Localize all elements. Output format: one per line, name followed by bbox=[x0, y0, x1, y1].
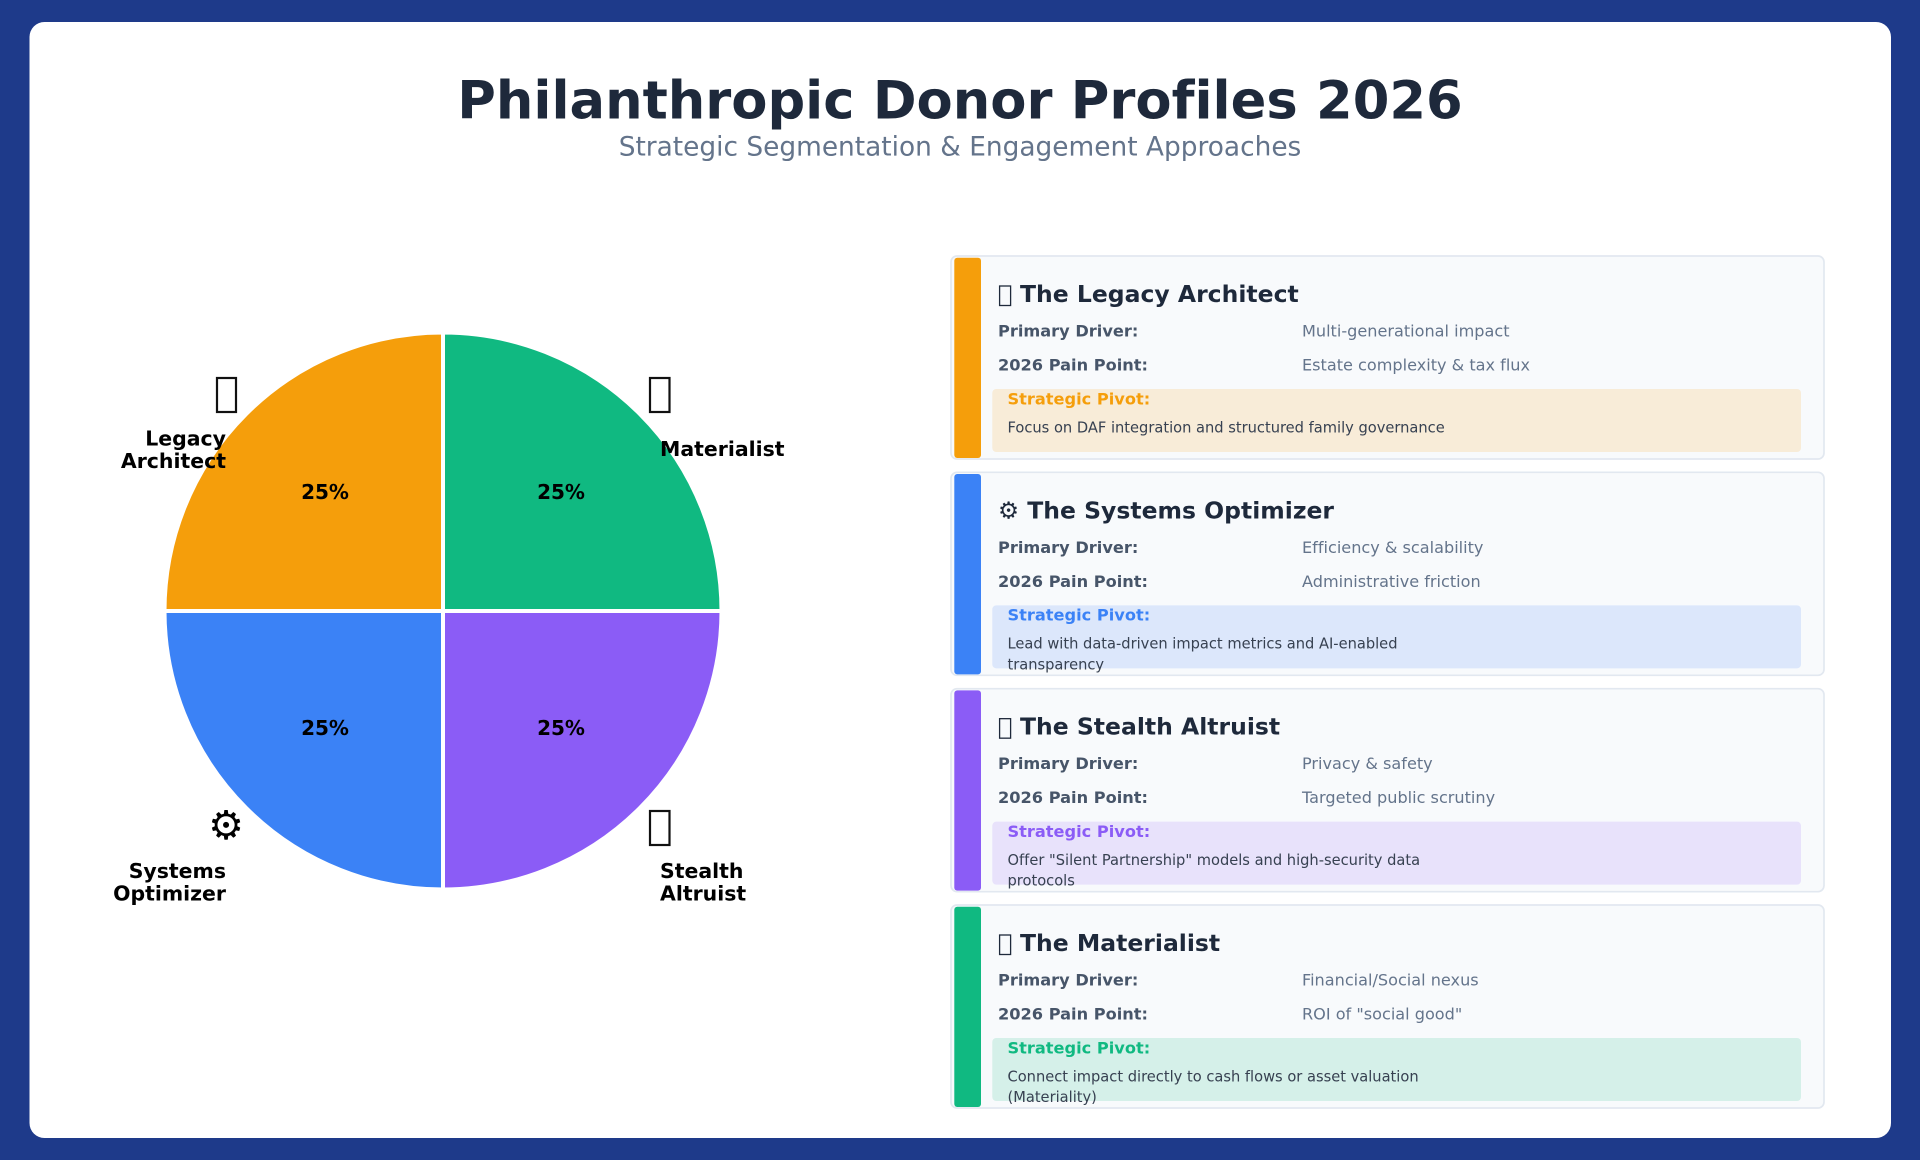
primary driver row bbox=[998, 322, 1510, 340]
pain point row: Administrative friction bbox=[1302, 572, 1481, 591]
card heading: The Stealth Altruist bbox=[1020, 713, 1280, 741]
panel: The Materialist bbox=[951, 905, 1824, 1108]
strategic pivot box bbox=[992, 605, 1801, 673]
panel: The Systems Optimizer bbox=[951, 472, 1824, 675]
primary driver row: Primary Driver: bbox=[998, 970, 1138, 990]
pain point row: ROI of "social good" bbox=[1302, 1004, 1462, 1024]
icon: placeholder glyph bbox=[1000, 935, 1011, 954]
primary driver row: Multi-generational impact bbox=[1302, 322, 1510, 340]
label: Systems Optimizer: Systems bbox=[129, 859, 226, 883]
slice: Materialist 25% bbox=[443, 332, 722, 611]
card background bbox=[951, 689, 1824, 892]
percentage: Legacy Architect: 25% bbox=[301, 480, 349, 504]
icon: Stealth Altruist placeholder glyph bbox=[650, 811, 670, 845]
strategic pivot box bbox=[992, 1038, 1801, 1106]
pain point row: 2026 Pain Point: bbox=[998, 356, 1148, 374]
primary driver row bbox=[998, 970, 1479, 990]
card background bbox=[951, 905, 1824, 1108]
card heading: ⚙ The Systems Optimizer bbox=[998, 496, 1334, 524]
percentage: Stealth Altruist: 25% bbox=[537, 716, 585, 740]
accent bar bbox=[954, 258, 981, 458]
pain point row bbox=[998, 1004, 1462, 1024]
strategic pivot box: Connect impact directly to cash flows or asset valuation bbox=[1008, 1068, 1419, 1085]
strategic pivot box bbox=[992, 389, 1801, 452]
card background bbox=[951, 472, 1824, 675]
strategic pivot box: Strategic Pivot: bbox=[1008, 606, 1150, 625]
accent bar bbox=[954, 907, 981, 1107]
title: Philanthropic Donor Profiles 2026 bbox=[457, 70, 1463, 132]
label: Legacy Architect: Architect bbox=[121, 449, 226, 473]
icon: gear: ⚙ bbox=[208, 803, 244, 849]
primary driver row: Financial/Social nexus bbox=[1302, 970, 1479, 990]
primary driver row: Privacy & safety bbox=[1302, 754, 1433, 773]
pain point row: Estate complexity & tax flux bbox=[1302, 356, 1530, 374]
slice: Legacy Architect 25% bbox=[164, 332, 443, 611]
icon: Legacy Architect placeholder glyph bbox=[217, 378, 236, 412]
primary driver row: Primary Driver: bbox=[998, 754, 1138, 773]
icon: placeholder glyph bbox=[1000, 719, 1011, 738]
percentage: Materialist: 25% bbox=[537, 480, 585, 504]
pain point row bbox=[998, 572, 1481, 591]
strategic pivot box: Lead with data-driven impact metrics and AI-enabled bbox=[1008, 636, 1398, 653]
strategic pivot box: protocols bbox=[1008, 873, 1075, 890]
panel: The Legacy Architect bbox=[951, 256, 1824, 459]
pain point row: 2026 Pain Point: bbox=[998, 572, 1148, 591]
label: Stealth Altruist: Altruist bbox=[660, 882, 746, 906]
primary driver row bbox=[998, 538, 1484, 557]
card heading: The Legacy Architect bbox=[1020, 280, 1299, 308]
pain point row bbox=[998, 356, 1530, 374]
subtitle: Strategic Segmentation & Engagement Approaches bbox=[619, 132, 1301, 163]
label: Stealth Altruist: Stealth bbox=[660, 859, 743, 883]
strategic pivot box: Strategic Pivot: bbox=[1008, 389, 1150, 408]
icon: placeholder glyph bbox=[1000, 286, 1011, 306]
primary driver row bbox=[998, 754, 1433, 773]
panel: The Stealth Altruist bbox=[951, 689, 1824, 892]
slice: Stealth Altruist 25% bbox=[443, 611, 722, 890]
label: Materialist: Materialist bbox=[660, 437, 785, 461]
pain point row bbox=[998, 788, 1496, 807]
percentage: Systems Optimizer: 25% bbox=[301, 716, 349, 740]
pain point row: 2026 Pain Point: bbox=[998, 1004, 1148, 1024]
card heading: The Materialist bbox=[1020, 929, 1220, 957]
icon: Materialist placeholder glyph bbox=[650, 378, 670, 412]
strategic pivot box bbox=[992, 822, 1801, 890]
strategic pivot box: Offer "Silent Partnership" models and high-security data bbox=[1008, 852, 1420, 869]
label: Systems Optimizer: Optimizer bbox=[113, 882, 227, 906]
accent bar bbox=[954, 474, 981, 674]
strategic pivot box: transparency bbox=[1008, 656, 1104, 673]
primary driver row: Efficiency & scalability bbox=[1302, 538, 1484, 557]
primary driver row: Primary Driver: bbox=[998, 538, 1138, 557]
primary driver row: Primary Driver: bbox=[998, 322, 1138, 340]
pie chart bbox=[164, 332, 722, 890]
pain point row: Targeted public scrutiny bbox=[1301, 788, 1496, 807]
strategic pivot box: Strategic Pivot: bbox=[1008, 1038, 1150, 1057]
strategic pivot box: Strategic Pivot: bbox=[1008, 822, 1150, 841]
strategic pivot box: (Materiality) bbox=[1008, 1089, 1097, 1106]
slice: Systems Optimizer 25% bbox=[164, 611, 443, 890]
accent bar bbox=[954, 690, 981, 891]
card background bbox=[951, 256, 1824, 459]
label: Legacy Architect: Legacy bbox=[145, 426, 226, 450]
pain point row: 2026 Pain Point: bbox=[998, 788, 1148, 807]
strategic pivot box: Focus on DAF integration and structured family governance bbox=[1008, 419, 1445, 436]
